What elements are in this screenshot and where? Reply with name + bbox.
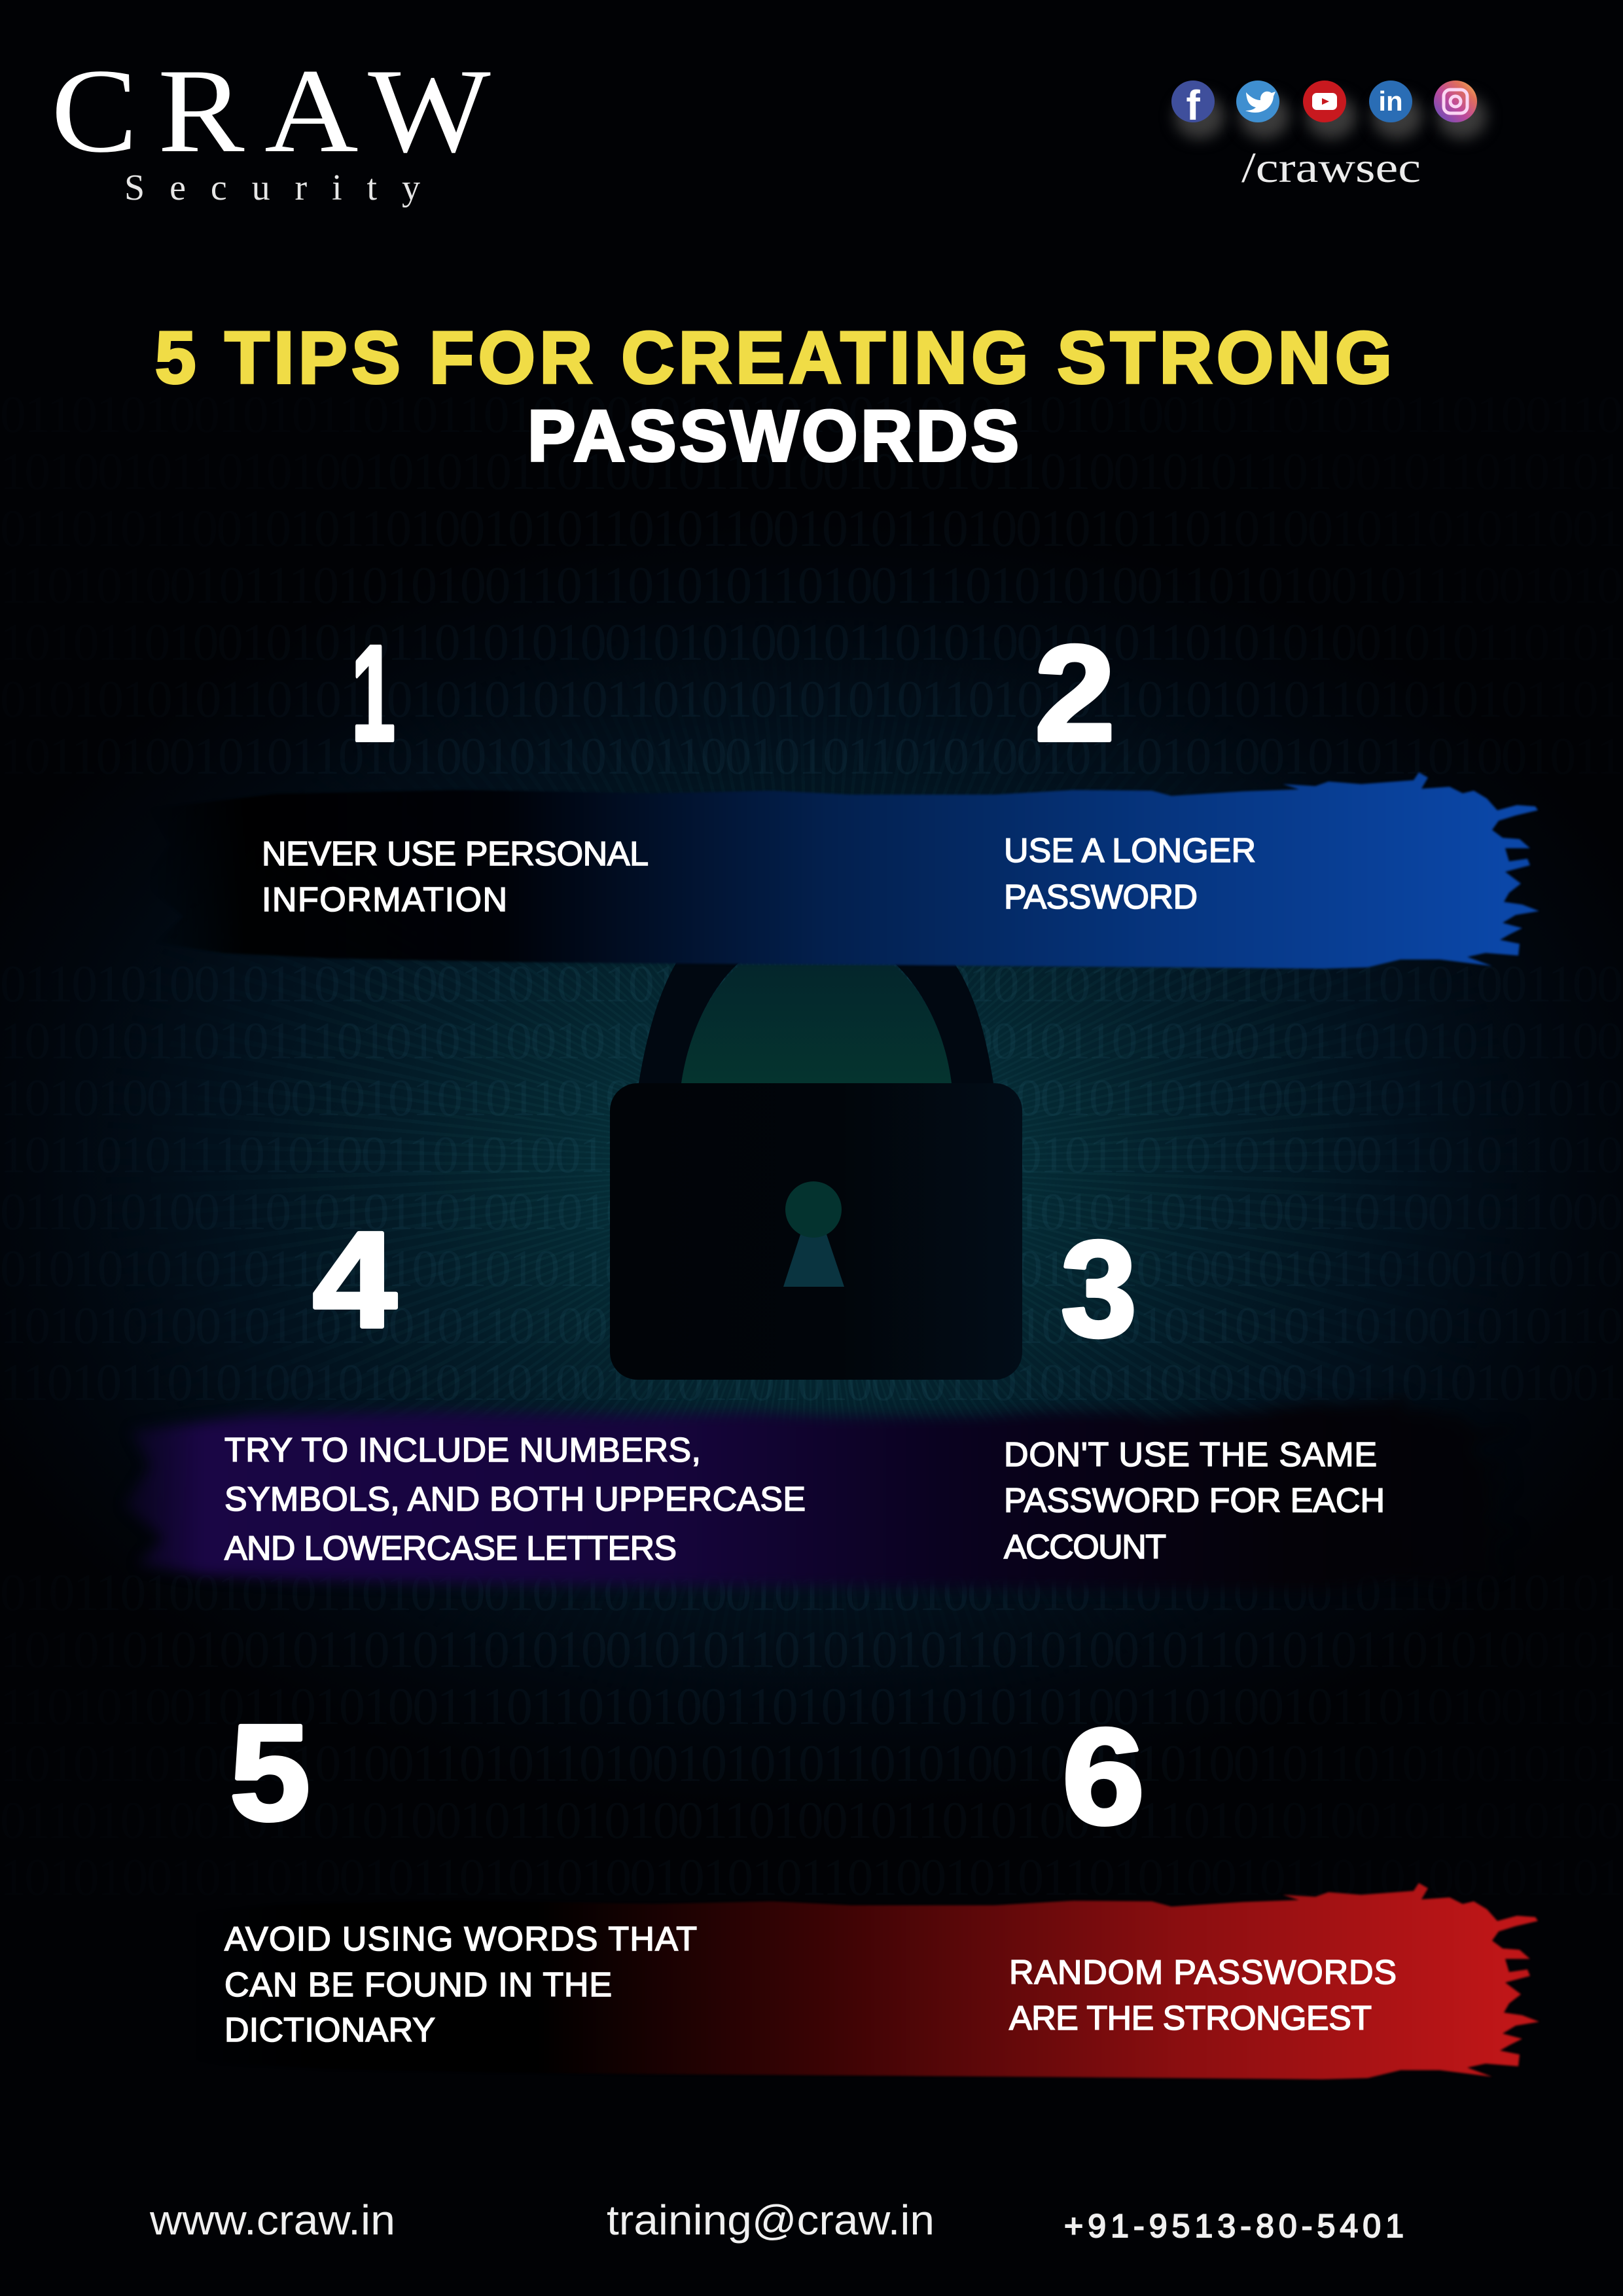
tip 5 text: DICTIONARY: [224, 2011, 435, 2049]
website: www.craw.in: [149, 2197, 395, 2244]
binary code background pattern: 1010101010010110101101010010101101010101101010010110101011010100101: [0, 1621, 1623, 1679]
binary code background pattern: 1011010010101101010010110101100101011010100101101010010101101001011: [0, 728, 1623, 785]
binary code background pattern: 1010110100101010011010110100101010110101001011010100101101010010101: [0, 1735, 1623, 1793]
binary code background pattern: 0101010101011010100101011010100101010110100101101001010110100101010: [0, 1240, 1623, 1298]
tip 2 text: PASSWORD: [1004, 878, 1198, 916]
binary code background pattern: 0110101100101011010010101101011001010110100101011010100101101011001: [0, 500, 1623, 558]
binary code background pattern: 0101101001010110101001011010100101101010010101101010100101101010101: [0, 1564, 1623, 1622]
tip 5 text: [224, 1920, 697, 2049]
tip 1 text: NEVER USE PERSONAL: [262, 835, 649, 873]
lock shackle: [639, 962, 993, 1083]
tip 6 text: ARE THE STRONGEST: [1009, 2000, 1372, 2037]
tip 5 text: AVOID USING WORDS THAT: [224, 1920, 697, 1958]
binary code background pattern: [0, 386, 1623, 1907]
lock shackle interior: [681, 965, 952, 1083]
binary code background pattern: 1010100110100101010101101001011010110101010010110101001010110101010: [0, 1069, 1623, 1127]
tip 3 text: ACCOUNT: [1004, 1528, 1166, 1566]
logo subtitle: Security: [124, 168, 420, 208]
lock body: [610, 1083, 1022, 1380]
tip 6 number: 6: [1062, 1701, 1145, 1853]
tip 1 text: INFORMATION: [262, 881, 507, 919]
tip 4 text: [224, 1431, 806, 1568]
tip 4 number: 4: [313, 1204, 397, 1356]
logo: [51, 45, 491, 208]
title: [155, 317, 1392, 476]
binary code background pattern: 1010101101011101010110010101101010110101001011010100101101010101100: [0, 1013, 1623, 1070]
tip 6 text: RANDOM PASSWORDS: [1009, 1954, 1397, 1992]
keyhole: [783, 1181, 844, 1287]
tip 5 text: CAN BE FOUND IN THE: [224, 1966, 612, 2004]
icon: linkedin: in: [1378, 86, 1403, 117]
binary code background pattern: 0110101001010110101101010010110101001101011010100101101010110100110: [0, 386, 1623, 444]
tip 4 text: SYMBOLS, AND BOTH UPPERCASE: [224, 1480, 806, 1518]
tip 5 number: 5: [230, 1697, 310, 1849]
binary code background pattern: 0110101001011010100101101010011010010110101001011010101001011010100: [0, 1792, 1623, 1850]
tip 6 text: [1009, 1954, 1397, 2037]
binary code background pattern: 1101011010100101010110100101011010100101101010110101001011010101001: [0, 1354, 1623, 1412]
title line 1: 5 TIPS FOR CREATING STRONG: [155, 317, 1392, 399]
binary code background pattern: 1010100101101001011010101001010101101001010110101001011010100101101: [0, 1849, 1623, 1907]
binary code background pattern: 1010101001011010010110100101101001010110101010010110101101001010110: [0, 1297, 1623, 1355]
email: training@craw.in: [607, 2197, 935, 2244]
tip 3 number: 3: [1061, 1213, 1137, 1365]
logo wordmark: CRAW: [51, 45, 491, 177]
binary code background pattern: 1101010010111010101001101101010110100111010101001101010010111001010: [0, 557, 1623, 615]
binary code background pattern: 1010010110101001010101101001011010010101011010010101101001011010101: [0, 443, 1623, 501]
binary code background pattern: 0101010101101011010101010110101010101011010101101010101101010101101: [0, 671, 1623, 728]
padlock watermark: [610, 962, 1022, 1380]
phone: +91-9513-80-5401: [1064, 2208, 1404, 2244]
social icons: [1171, 81, 1487, 192]
binary code background pattern: 0110101001011010100110101101001010110100101101010011010110101001100: [0, 956, 1623, 1013]
binary code background pattern: 1011010111010100110101001101010110101010010101101010101001101011010: [0, 1126, 1623, 1184]
tip 3 text: [1004, 1436, 1385, 1566]
tip 2 text: [1004, 832, 1256, 916]
brush band: tips 4 and 3: [124, 1394, 1520, 1590]
tip 1 number: 1: [351, 618, 395, 770]
tip 2 number: 2: [1035, 618, 1115, 770]
icon: facebook: f: [1186, 82, 1200, 129]
title line 2: PASSWORDS: [527, 396, 1019, 476]
tip 3 text: PASSWORD FOR EACH: [1004, 1482, 1385, 1520]
binary code background pattern: 1010110100101010110101010010101001011010100101011010101001010110101: [0, 614, 1623, 672]
tip 3 text: DON'T USE THE SAME: [1004, 1436, 1377, 1474]
tip 2 text: USE A LONGER: [1004, 832, 1256, 870]
binary code background pattern: 1101010010110101001110110101001101010110101010011010010110101001101: [0, 1678, 1623, 1736]
icon: linkedin: [1369, 81, 1422, 139]
binary code background pattern: 0110101001101010110100101011010101101010011010110101001101001011000: [0, 1183, 1623, 1241]
tip 4 text: TRY TO INCLUDE NUMBERS,: [224, 1431, 701, 1469]
social handle: /crawsec: [1241, 144, 1421, 192]
tip 1 text: [262, 835, 649, 919]
icon: facebook: [1171, 81, 1224, 139]
icon: instagram: [1434, 81, 1487, 139]
brush band: tips 1 and 2: [144, 772, 1539, 969]
brush band: tips 5 and 6: [144, 1883, 1539, 2079]
footer contacts: [149, 2197, 1404, 2244]
icon: youtube: [1303, 81, 1356, 139]
icon: twitter: [1236, 81, 1289, 139]
tip 4 text: AND LOWERCASE LETTERS: [224, 1530, 677, 1568]
